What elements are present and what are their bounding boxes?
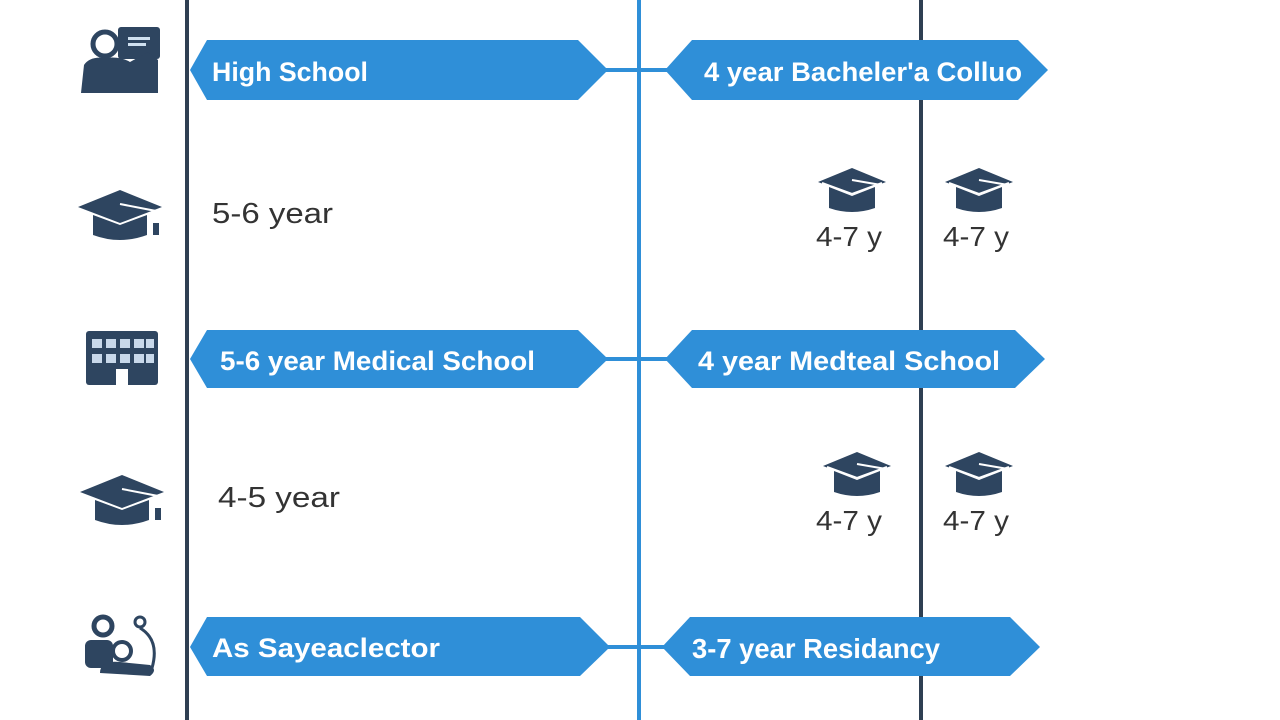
banner: As Sayeaclector: As Sayeaclector — [212, 633, 441, 663]
connector row 2 — [600, 357, 670, 361]
banner: 3-7 year Residancy — [662, 617, 1040, 676]
banner: High School: High School — [212, 57, 368, 87]
icon: graduation cap 2 — [80, 475, 164, 525]
connector row 1 — [600, 68, 670, 72]
banner: 3-7 year Residancy: 3-7 year Residancy — [692, 633, 940, 664]
icon: building calendar — [86, 331, 158, 385]
cap + 4-7 y row1 b — [943, 168, 1013, 252]
vertical line: right — [919, 0, 923, 720]
banner: 5-6 year Medical School: 5-6 year Medical School — [220, 346, 535, 376]
cap + 4-7 y row1 b: 4-7 y — [943, 221, 1009, 252]
cap + 4-7 y row2 a: 4-7 y — [816, 505, 882, 536]
icon: doctor with stethoscope — [85, 617, 154, 676]
icon: teacher — [81, 27, 160, 93]
banner: 4 year Bachelor's College: 4 year Bacheler'a Colluo — [704, 57, 1022, 87]
cap + 4-7 y row2 b — [943, 452, 1013, 536]
banner: 4 year Bachelor's College — [665, 40, 1048, 100]
cap + 4-7 y row1 a — [816, 168, 886, 252]
banner: 4 year Medical School — [665, 330, 1045, 388]
text: 5-6 year: 5-6 year — [212, 198, 333, 230]
banner: As Sayeaclector — [190, 617, 610, 676]
cap + 4-7 y row1 a: 4-7 y — [816, 221, 882, 252]
banner: 4 year Medical School: 4 year Medteal School — [698, 346, 1000, 376]
cap + 4-7 y row2 a — [816, 452, 891, 536]
banner: 5-6 year Medical School — [190, 330, 608, 388]
cap + 4-7 y row2 b: 4-7 y — [943, 505, 1009, 536]
text: 4-5 year: 4-5 year — [218, 482, 340, 514]
vertical line: center blue — [637, 0, 641, 720]
icon: graduation cap — [78, 190, 162, 240]
connector row 3 — [600, 645, 670, 649]
banner: High School — [190, 40, 608, 100]
vertical line: left — [185, 0, 189, 720]
